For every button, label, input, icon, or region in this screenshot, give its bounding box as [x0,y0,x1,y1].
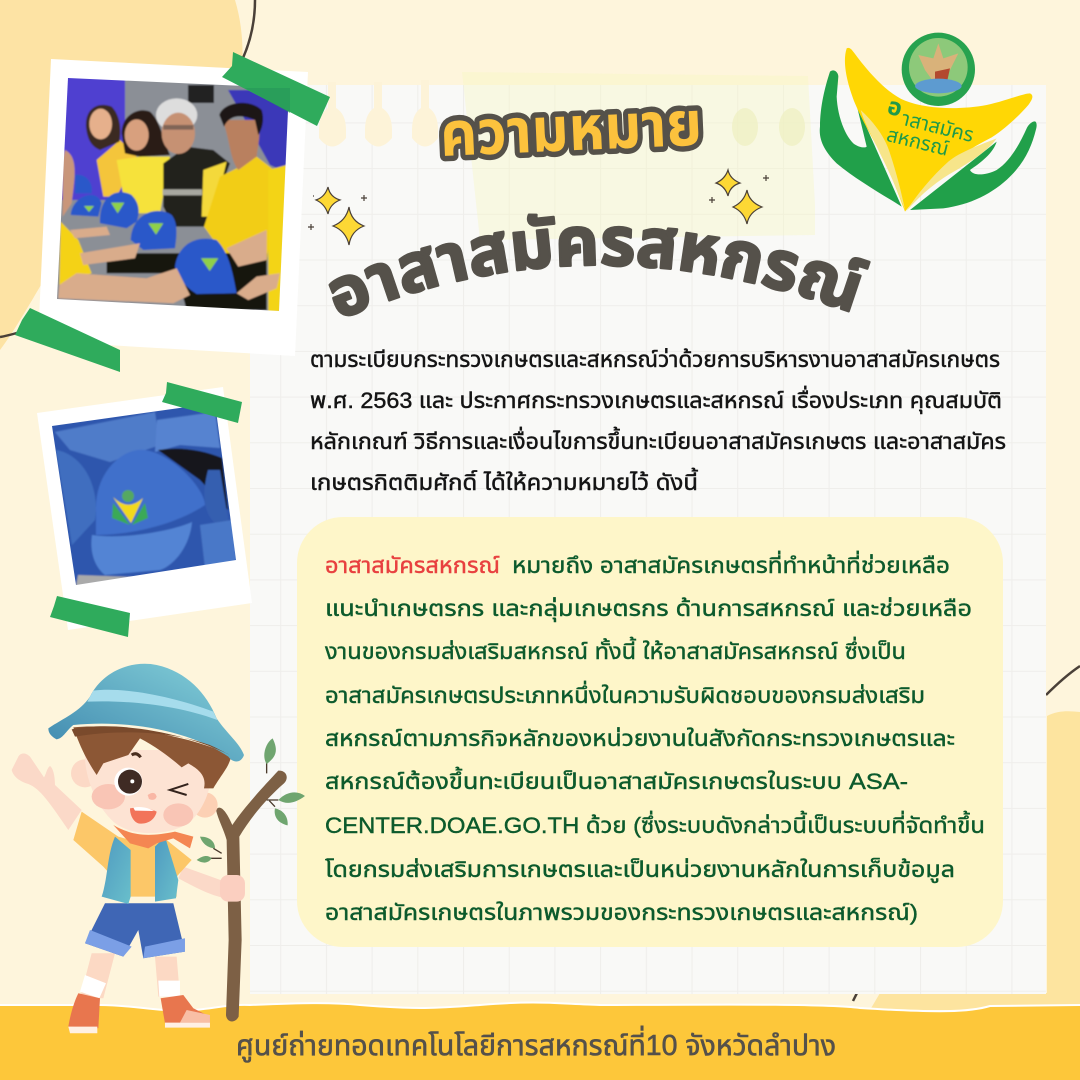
intro paragraph: หลักเกณฑ์ วิธีการและเงื่อนไขการขึ้นทะเบียนอาสาสมัครเกษตร และอาสาสมัคร [310,426,1006,454]
logo: yellow V [845,48,1032,212]
character: boy with walking stick [12,664,305,1033]
notebook paper [250,80,1046,994]
footer text: ศูนย์ถ่ายทอดเทคโนโลยีการสหกรณ์ที่10 จังหวัดลำปาง [236,1025,836,1063]
logo: wordmark: อ [885,93,905,123]
stick and leaves [197,738,305,1021]
definition text: อาสาสมัครเกษตรในภาพรวมของกระทรวงเกษตรและสหกรณ์) [325,900,918,925]
hair [73,727,232,788]
right arm [178,867,227,898]
title: ความหมาย: ความหมาย [439,90,703,170]
definition text [325,550,985,925]
definition text: สหกรณ์ตามภารกิจหลักของหน่วยงานในสังกัดกระทรวงเกษตรและ [325,726,955,751]
logo: wordmark: สหกรณ์ [884,124,951,161]
green tape 3 [162,382,242,423]
polaroid photo 2 [37,387,252,630]
background blob right [870,711,1080,1010]
logo: hands [820,70,902,207]
green tape 2 [15,308,120,372]
caps [71,175,237,294]
title: อาสาสมัครสหกรณ์ [338,265,860,320]
green tape 1 [222,52,330,126]
pale green sticky note [462,72,815,240]
footer band [0,1003,1080,1080]
head [71,727,232,833]
hat [48,664,244,762]
definition card [297,517,1003,947]
definition text: งานของกรมส่งเสริมสหกรณ์ ทั้งนี้ ให้อาสาสมัครสหกรณ์ ซึ่งเป็น [325,636,906,664]
logo: emblem [902,33,975,106]
photo: volunteers holding blue caps [57,78,288,311]
green tape 4 [50,596,130,637]
definition text: โดยกรมส่งเสริมการเกษตรและเป็นหน่วยงานหลักในการเก็บข้อมูล [325,857,955,883]
intro paragraph: ตามระเบียบกระทรวงเกษตรและสหกรณ์ว่าด้วยการบริหารงานอาสาสมัครเกษตร [310,347,1000,372]
polaroid photo 1 [38,59,308,356]
face details [114,768,142,796]
shirt and vest [73,812,192,897]
definition text: อาสาสมัครสหกรณ์ [325,553,500,578]
definition text: CENTER.DOAE.GO.TH ด้วย (ซึ่งระบบดังกล่าวนี้เป็นระบบที่จัดทำขึ้น [325,810,985,838]
logo [820,33,1037,212]
definition text: อาสาสมัครเกษตรประเภทหนึ่งในความรับผิดชอบของกรมส่งเสริม [325,680,925,708]
intro paragraph [310,347,1006,495]
definition text: สหกรณ์ต้องขึ้นทะเบียนเป็นอาสาสมัครเกษตรในระบบ ASA- [325,766,908,794]
sparkles left [308,187,367,245]
text: อาสาสมัครสหกรณ์ [328,214,871,316]
definition text: หมายถึง อาสาสมัครเกษตรที่ทำหน้าที่ช่วยเหลือ [512,550,950,578]
photo: blue cap with logo [50,400,240,590]
raised arm [12,753,82,830]
shorts [85,903,185,958]
definition text: แนะนำเกษตรกร และกลุ่มเกษตรกร ด้านการสหกรณ์ และช่วยเหลือ [325,596,972,622]
legs and shoes [68,953,210,1033]
logo: wordmark [878,93,979,166]
intro paragraph: พ.ศ. 2563 และ ประกาศกระทรวงเกษตรและสหกรณ์ เรื่องประเภท คุณสมบัติ [310,385,1002,414]
intro paragraph: เกษตรกิตติมศักดิ์ ได้ให้ความหมายไว้ ดังนี้ [310,467,698,495]
sparkles right [709,170,769,224]
scarf [113,825,193,848]
spiral tabs [319,80,438,146]
background blob top left [0,0,243,350]
logo: wordmark: าสาสมัคร [899,108,976,147]
